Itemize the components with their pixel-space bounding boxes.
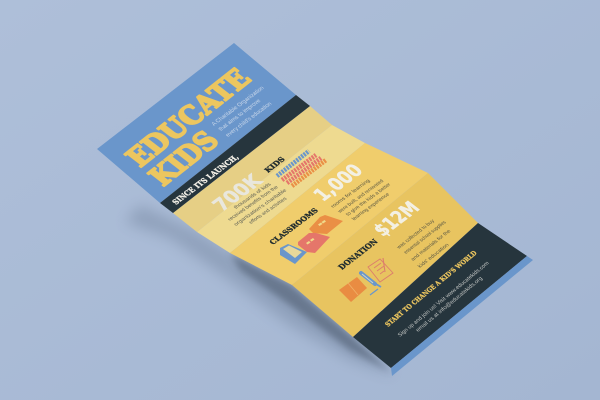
stat: 1,000: 1,000	[308, 160, 368, 205]
text: donation description: was collected to buy	[396, 218, 436, 250]
text: kids description: thousands of kids	[233, 182, 273, 210]
panel: deep yellow section	[292, 173, 478, 337]
icon: school buildings	[280, 215, 343, 264]
panel: dark footer	[353, 223, 527, 368]
text: donation description: and materials for the	[410, 229, 453, 262]
label: DONATION: DONATION	[336, 238, 380, 271]
text: classrooms description: were built, and renovated	[337, 179, 385, 214]
text: kids description: organization's charitable	[233, 188, 288, 227]
label: CLASSROOMS: CLASSROOMS	[267, 207, 320, 246]
panel: yellow top strip	[173, 106, 332, 232]
text: kids description: efforts and activities	[248, 196, 289, 225]
text: donation description: kids' education	[417, 243, 451, 269]
brochure	[97, 43, 533, 376]
icon: book	[339, 277, 367, 302]
panel: blue header	[97, 43, 296, 203]
text: classrooms description: rooms for learning	[330, 178, 372, 209]
panel: light yellow section	[197, 125, 365, 253]
text: donation description	[396, 218, 453, 269]
subtitle: that aims to improve	[218, 98, 263, 132]
text: kids description: received benefits from the	[227, 185, 280, 222]
heading: call to action: START TO CHANGE A KID'S WORLD	[383, 249, 479, 328]
text: donation description: essential school supplies	[403, 220, 448, 255]
label: KIDS: KIDS	[262, 155, 287, 174]
text: classrooms description: learning experience	[351, 192, 391, 222]
icon: pen	[361, 273, 381, 295]
text: contact details: email us at info@educatekids.org	[415, 276, 484, 333]
subtitle: every child's education	[225, 102, 274, 138]
text: contact details: Sign up and join us! Visit www.educatekids.com	[397, 260, 491, 338]
heading: since its launch: SINCE ITS LAUNCH,	[170, 153, 241, 206]
panel: blue footer strip	[391, 256, 533, 376]
panel: mid yellow section	[230, 143, 428, 285]
subtitle: A Charitable Organization	[211, 86, 266, 127]
icon: notepad	[368, 258, 393, 282]
panel: dark launch band	[160, 95, 310, 213]
title: KIDS: KIDS	[142, 125, 226, 191]
paper shadow	[125, 205, 395, 376]
chart: pictogram of kids	[277, 151, 326, 186]
text: classrooms description	[330, 178, 393, 222]
stat: 700K: 700K	[207, 170, 268, 215]
text: classrooms description: to give the kids a better	[345, 182, 393, 217]
title: EDUCATE: EDUCATE	[119, 63, 258, 172]
stat: $12M: $12M	[368, 197, 425, 240]
